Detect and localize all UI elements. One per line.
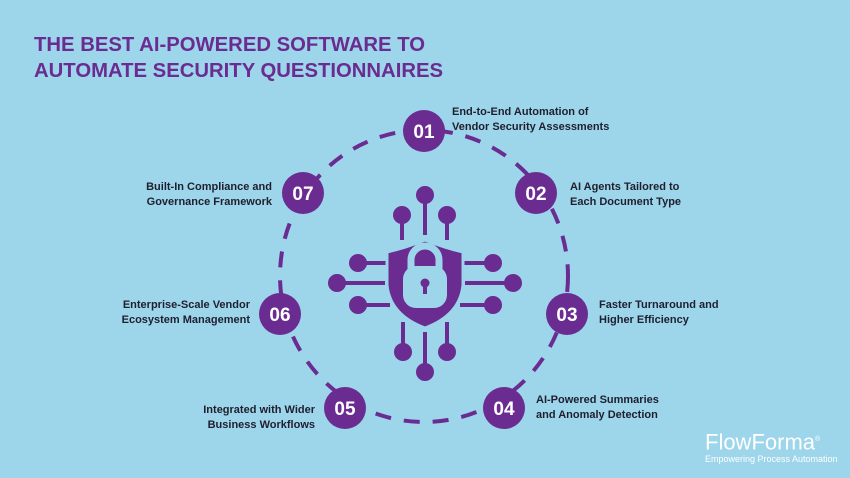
item 02 (570, 181, 681, 208)
item 05 (203, 404, 315, 431)
item 03: Faster Turnaround and (599, 299, 719, 311)
diagram: 05 (334, 399, 356, 420)
diagram: 02 (525, 184, 547, 205)
item 01: End-to-End Automation of (452, 106, 588, 118)
item 03 (599, 299, 719, 326)
item 02: Each Document Type (570, 196, 681, 208)
logo: FlowForma® (705, 429, 820, 454)
item 07: Built-In Compliance and (146, 181, 272, 193)
diagram: 06 (269, 305, 291, 326)
item 07: Governance Framework (147, 196, 272, 208)
icon: shield circuit (330, 188, 520, 379)
item 03: Higher Efficiency (599, 314, 689, 326)
diagram: 03 (556, 305, 578, 326)
item 07 (146, 181, 272, 208)
title (34, 34, 443, 82)
number circles (259, 110, 588, 429)
item 05: Integrated with Wider (203, 404, 315, 416)
diagram: 04 (493, 399, 515, 420)
logo: Empowering Process Automation (705, 454, 838, 464)
item 01: Vendor Security Assessments (452, 121, 609, 133)
dashed ring (280, 130, 568, 422)
item 06 (122, 299, 250, 326)
diagram: 01 (413, 122, 435, 143)
item 06: Ecosystem Management (122, 314, 250, 326)
item 01 (452, 106, 609, 133)
item 06: Enterprise-Scale Vendor (123, 299, 250, 311)
item 02: AI Agents Tailored to (570, 181, 679, 193)
title: AUTOMATE SECURITY QUESTIONNAIRES (34, 60, 443, 82)
diagram: 07 (292, 184, 314, 205)
item 05: Business Workflows (208, 419, 315, 431)
item 04 (536, 394, 659, 421)
item 04: and Anomaly Detection (536, 409, 658, 421)
title: THE BEST AI-POWERED SOFTWARE TO (34, 34, 425, 56)
item 04: AI-Powered Summaries (536, 394, 659, 406)
logo (705, 429, 838, 464)
